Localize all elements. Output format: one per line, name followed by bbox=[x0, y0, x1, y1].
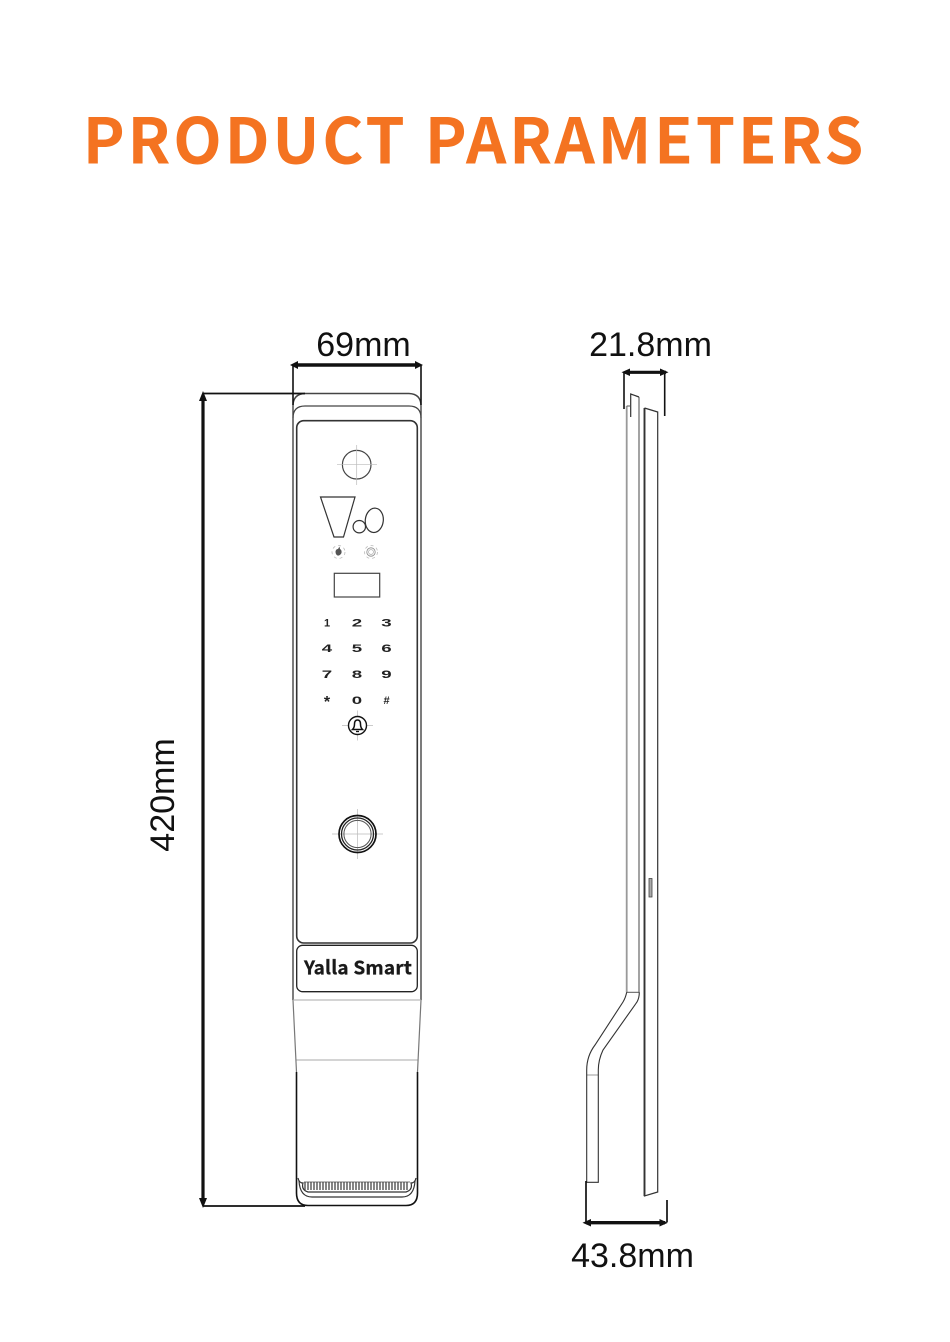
outer body outline bbox=[293, 394, 421, 1000]
keypad digits: # bbox=[383, 695, 390, 707]
display window bbox=[334, 573, 380, 597]
keypad digits: 1 bbox=[324, 618, 330, 630]
dimension: 21.8mm: 21.8mm bbox=[589, 326, 712, 364]
keypad digits: 5 bbox=[352, 643, 363, 655]
keypad digits: * bbox=[324, 694, 331, 711]
dimension: 43.8mm: 43.8mm bbox=[571, 1237, 694, 1275]
keypad digits: 8 bbox=[352, 669, 363, 681]
dimension: 43.8mm bbox=[571, 1181, 694, 1275]
icon: face indicator bbox=[364, 546, 378, 558]
sensor window bbox=[320, 497, 355, 537]
fingerprint reader bbox=[332, 809, 383, 859]
front view of lock bbox=[293, 394, 421, 1206]
camera bbox=[337, 445, 377, 485]
keypad digits: 7 bbox=[322, 669, 332, 681]
dimension: width 69mm: 69mm bbox=[316, 326, 411, 364]
dimension: 21.8mm bbox=[589, 326, 712, 416]
keypad digits: 3 bbox=[381, 617, 392, 629]
dimension: height 420mm bbox=[144, 391, 305, 1208]
keypad digits: 9 bbox=[381, 669, 392, 681]
main panel bbox=[297, 421, 417, 943]
brand name: Yalla Smart bbox=[303, 954, 412, 980]
keypad digits: 4 bbox=[322, 643, 333, 655]
brand plate bbox=[297, 945, 417, 992]
dimension: height 420mm: 420mm bbox=[144, 738, 182, 852]
small lens circles bbox=[353, 507, 385, 533]
title: PRODUCT PARAMETERS bbox=[83, 92, 866, 182]
doorbell button bbox=[342, 710, 373, 740]
keypad digits: 2 bbox=[352, 617, 362, 629]
inner lock body bbox=[644, 408, 658, 1196]
outer mounting plate bbox=[627, 397, 639, 992]
keypad digits: 0 bbox=[352, 695, 362, 707]
lower plate bbox=[296, 1072, 418, 1206]
keypad digits bbox=[322, 617, 392, 711]
side switch bbox=[649, 878, 652, 897]
keypad digits: 6 bbox=[381, 643, 392, 655]
lower grille bbox=[298, 1178, 416, 1197]
dimension: width 69mm bbox=[290, 326, 423, 405]
icon: hand indicator bbox=[332, 546, 345, 558]
side view of lock bbox=[587, 394, 658, 1196]
